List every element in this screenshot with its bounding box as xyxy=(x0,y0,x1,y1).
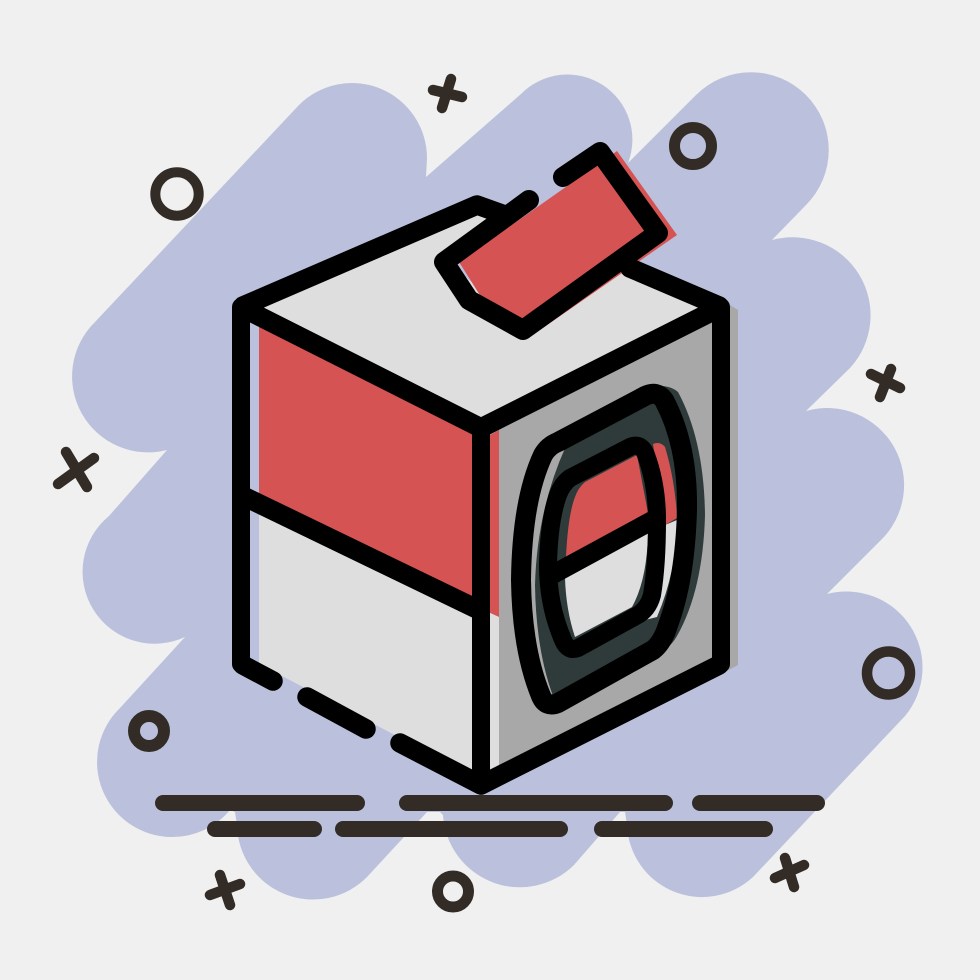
hole inner shadow xyxy=(535,386,705,696)
ballot paper xyxy=(459,151,677,330)
corner strip red xyxy=(488,430,499,617)
corner strip white xyxy=(488,612,499,773)
flag seen through window xyxy=(565,443,677,637)
box top face xyxy=(241,205,721,428)
ballot slot outline xyxy=(444,152,658,330)
decorative crosses xyxy=(58,79,900,905)
window outlines xyxy=(521,394,687,704)
ground lines xyxy=(163,803,817,829)
background blob xyxy=(72,72,923,900)
box outlines xyxy=(241,205,721,785)
box left face white band xyxy=(259,505,481,780)
box right face xyxy=(481,305,738,787)
decorative circles xyxy=(134,128,910,907)
box left face red band xyxy=(259,322,481,612)
